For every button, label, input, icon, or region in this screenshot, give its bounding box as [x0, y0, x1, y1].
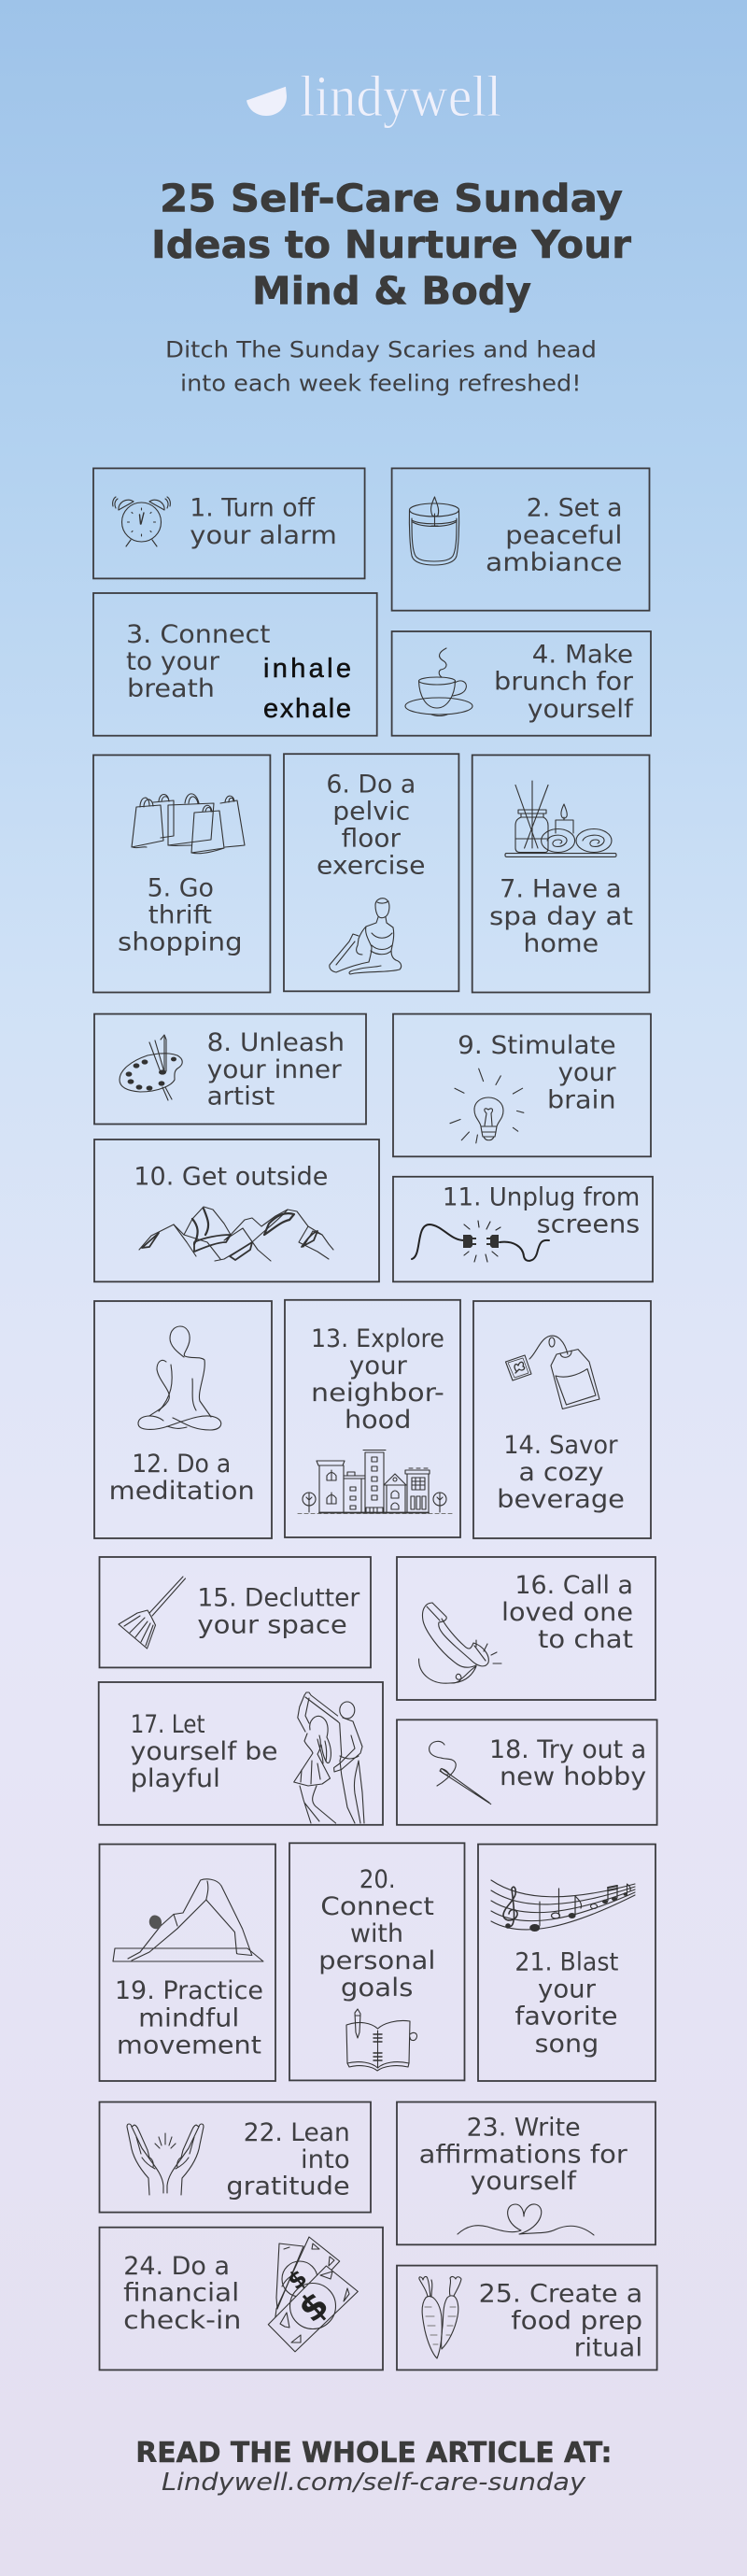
text: song	[535, 2030, 599, 2059]
text: thrift	[148, 901, 212, 930]
text: back bill dollar sign: $	[282, 2264, 312, 2295]
icon: dancing couple	[294, 1692, 364, 1823]
panel 9: stimulate your brain	[393, 1014, 651, 1156]
text: beverage	[497, 1485, 625, 1514]
text: with	[350, 1919, 403, 1948]
text	[318, 1865, 436, 2003]
icon: seated stretch pose	[330, 899, 402, 974]
text	[109, 1450, 255, 1506]
text: artist	[207, 1082, 275, 1111]
text: 20.	[359, 1865, 396, 1894]
panel 24: financial check-in	[99, 2228, 383, 2370]
icon: broom	[119, 1577, 185, 1649]
text	[190, 494, 337, 550]
text	[123, 2252, 241, 2335]
panel 1: turn off your alarm	[93, 468, 365, 578]
panel 21: blast your favorite song	[478, 1844, 655, 2081]
text: new hobby	[500, 1762, 646, 1791]
text: into	[301, 2145, 350, 2174]
text: 10. Get outside	[134, 1163, 328, 1192]
subtitle	[165, 336, 597, 396]
panel 22: lean into gratitude	[99, 2102, 371, 2213]
text: your space	[197, 1611, 347, 1640]
text: shopping	[118, 928, 243, 957]
icon: music staff	[491, 1880, 635, 1932]
text: brunch for	[494, 668, 634, 697]
panel 5: go thrift shopping	[93, 755, 270, 992]
text: mindful	[138, 2004, 239, 2033]
text: 6. Do a	[326, 770, 416, 800]
text: 12. Do a	[132, 1450, 231, 1479]
panel 8: unleash your inner artist	[94, 1014, 366, 1125]
text: 8. Unleash	[207, 1028, 345, 1057]
text: 5. Go	[148, 874, 214, 902]
panel 10: get outside	[94, 1139, 379, 1281]
icon: unplugged cord	[412, 1221, 549, 1262]
icon: open hands	[127, 2124, 204, 2195]
icon: mountains	[139, 1207, 333, 1261]
text: movement	[117, 2031, 261, 2060]
text: a cozy	[519, 1458, 604, 1487]
text: affirmations for	[419, 2140, 628, 2169]
text: to chat	[538, 1625, 633, 1654]
text: your alarm	[190, 521, 337, 550]
text: Connect	[320, 1892, 434, 1921]
icon: notebook and pen	[346, 2009, 417, 2071]
panel 12: do a meditation	[94, 1301, 272, 1538]
panel 6: do a pelvic floor exercise	[284, 754, 458, 991]
panel 13: explore your neighborhood	[285, 1300, 460, 1537]
handwriting: inhale exhale: inhale	[263, 654, 351, 684]
text: 11. Unplug from	[443, 1182, 640, 1211]
footer: read the whole article: READ THE WHOLE ARTICLE AT:	[135, 2437, 613, 2470]
panel 19: practice mindful movement	[99, 1844, 275, 2081]
panel 15: declutter your space	[99, 1557, 371, 1667]
text: peaceful	[505, 521, 622, 550]
title: Mind & Body	[252, 268, 531, 313]
text	[497, 1431, 625, 1514]
text: 21. Blast	[514, 1948, 618, 1977]
icon: shopping bags	[132, 794, 245, 854]
icon: needle and thread	[430, 1741, 491, 1805]
text: 2. Set a	[527, 494, 622, 523]
text: front bill dollar sign: $	[290, 2284, 336, 2330]
text: your inner	[207, 1055, 343, 1084]
text	[126, 620, 270, 703]
panel 17: let yourself be playful	[99, 1682, 383, 1825]
text: yourself	[471, 2167, 578, 2196]
title: Ideas to Nurture Your	[151, 222, 632, 267]
text: personal	[318, 1946, 436, 1975]
text: brain	[547, 1085, 616, 1114]
panel 2: set a peaceful ambiance	[392, 468, 650, 611]
text: 19. Practice	[115, 1976, 263, 2005]
icon: money bills	[268, 2237, 358, 2352]
text	[131, 1710, 278, 1793]
text: exercise	[317, 851, 426, 880]
text: food prep	[511, 2307, 642, 2335]
panel 14: savor a cozy beverage	[473, 1301, 651, 1538]
icon: heart line	[458, 2204, 594, 2235]
text: your	[538, 1975, 597, 2004]
text: 15. Declutter	[197, 1584, 360, 1613]
icon: alarm clock	[113, 497, 170, 546]
text: 23. Write	[467, 2114, 581, 2143]
icon: paint palette	[120, 1035, 182, 1100]
footer: read the whole article: Lindywell.com/self-care-sunday	[162, 2469, 586, 2497]
text: screens	[537, 1210, 640, 1238]
text	[489, 1735, 646, 1791]
text: ritual	[574, 2334, 642, 2363]
text: floor	[342, 825, 402, 854]
panel 4: make brunch for yourself	[392, 631, 651, 736]
handwriting: inhale exhale: exhale	[263, 694, 351, 724]
text: gratitude	[226, 2173, 350, 2201]
text: neighbor-	[311, 1379, 444, 1408]
text: ambiance	[486, 548, 622, 577]
panel 20: connect with personal goals	[289, 1843, 465, 2080]
handwriting: inhale exhale	[263, 654, 351, 724]
text	[118, 874, 243, 957]
front bill	[268, 2266, 358, 2352]
text: 13. Explore	[311, 1324, 444, 1353]
icon: city buildings	[298, 1450, 453, 1513]
text: check-in	[123, 2306, 241, 2335]
text	[501, 1571, 633, 1654]
icon: candle	[409, 497, 459, 565]
text: to your	[126, 647, 220, 676]
panel 18: try out a new hobby	[397, 1720, 657, 1825]
text: 16. Call a	[514, 1571, 633, 1600]
text: meditation	[109, 1477, 255, 1506]
text	[489, 875, 633, 958]
text: playful	[131, 1764, 220, 1793]
text: hood	[345, 1406, 411, 1435]
text: yourself	[528, 695, 635, 724]
logo: lindywell: lindywell	[300, 65, 501, 129]
text	[479, 2280, 642, 2363]
panel 23: write affirmations for yourself	[397, 2102, 655, 2244]
text: 22. Lean	[244, 2118, 350, 2147]
title	[151, 177, 632, 313]
text: 4. Make	[532, 641, 633, 670]
icon: tea bag	[506, 1336, 599, 1408]
text	[458, 1031, 617, 1114]
text	[514, 1948, 618, 2059]
text: goals	[341, 1974, 413, 2003]
icon: coffee cup	[405, 648, 472, 715]
text: 17. Let	[131, 1710, 205, 1739]
panel 7: spa day at home	[472, 755, 650, 992]
icon: carrots	[419, 2276, 461, 2358]
text: loved one	[501, 1598, 633, 1627]
text	[207, 1028, 345, 1111]
text	[494, 641, 635, 724]
text	[226, 2118, 350, 2201]
panel 11: unplug from screens	[393, 1177, 653, 1281]
text: financial	[123, 2279, 239, 2308]
text: 18. Try out a	[489, 1735, 646, 1764]
panel 25: create a food prep ritual	[397, 2266, 657, 2370]
text: favorite	[514, 2003, 618, 2031]
icon: telephone	[419, 1603, 501, 1683]
text: your	[558, 1058, 617, 1087]
icon: yoga downward dog	[113, 1879, 263, 1961]
text: 7. Have a	[500, 875, 622, 904]
icon: spa set	[505, 781, 616, 856]
subtitle: into each week feeling refreshed!	[180, 370, 581, 396]
text: home	[523, 929, 599, 958]
text: 25. Create a	[479, 2280, 642, 2309]
icon: meditating figure	[138, 1326, 221, 1430]
panel 16: call a loved one to chat	[397, 1557, 655, 1700]
subtitle: Ditch The Sunday Scaries and head	[165, 336, 597, 362]
text: 9. Stimulate	[458, 1031, 616, 1060]
text: breath	[127, 674, 215, 703]
text: 24. Do a	[123, 2252, 230, 2281]
text: 3. Connect	[126, 620, 270, 649]
text: 14. Savor	[503, 1431, 618, 1460]
text	[317, 770, 426, 880]
text: 1. Turn off	[190, 494, 316, 523]
text	[197, 1584, 360, 1640]
title: 25 Self-Care Sunday	[160, 177, 623, 221]
icon: light bulb	[450, 1069, 524, 1143]
text	[115, 1976, 263, 2060]
panel 3: connect to your breath	[93, 593, 377, 736]
text	[419, 2114, 628, 2196]
text	[443, 1182, 640, 1238]
footer: read the whole article	[135, 2437, 613, 2497]
text	[486, 494, 622, 577]
text: your	[349, 1352, 408, 1380]
text: yourself be	[131, 1737, 278, 1766]
text: pelvic	[332, 798, 410, 827]
text	[311, 1324, 444, 1435]
text: spa day at	[489, 902, 633, 931]
